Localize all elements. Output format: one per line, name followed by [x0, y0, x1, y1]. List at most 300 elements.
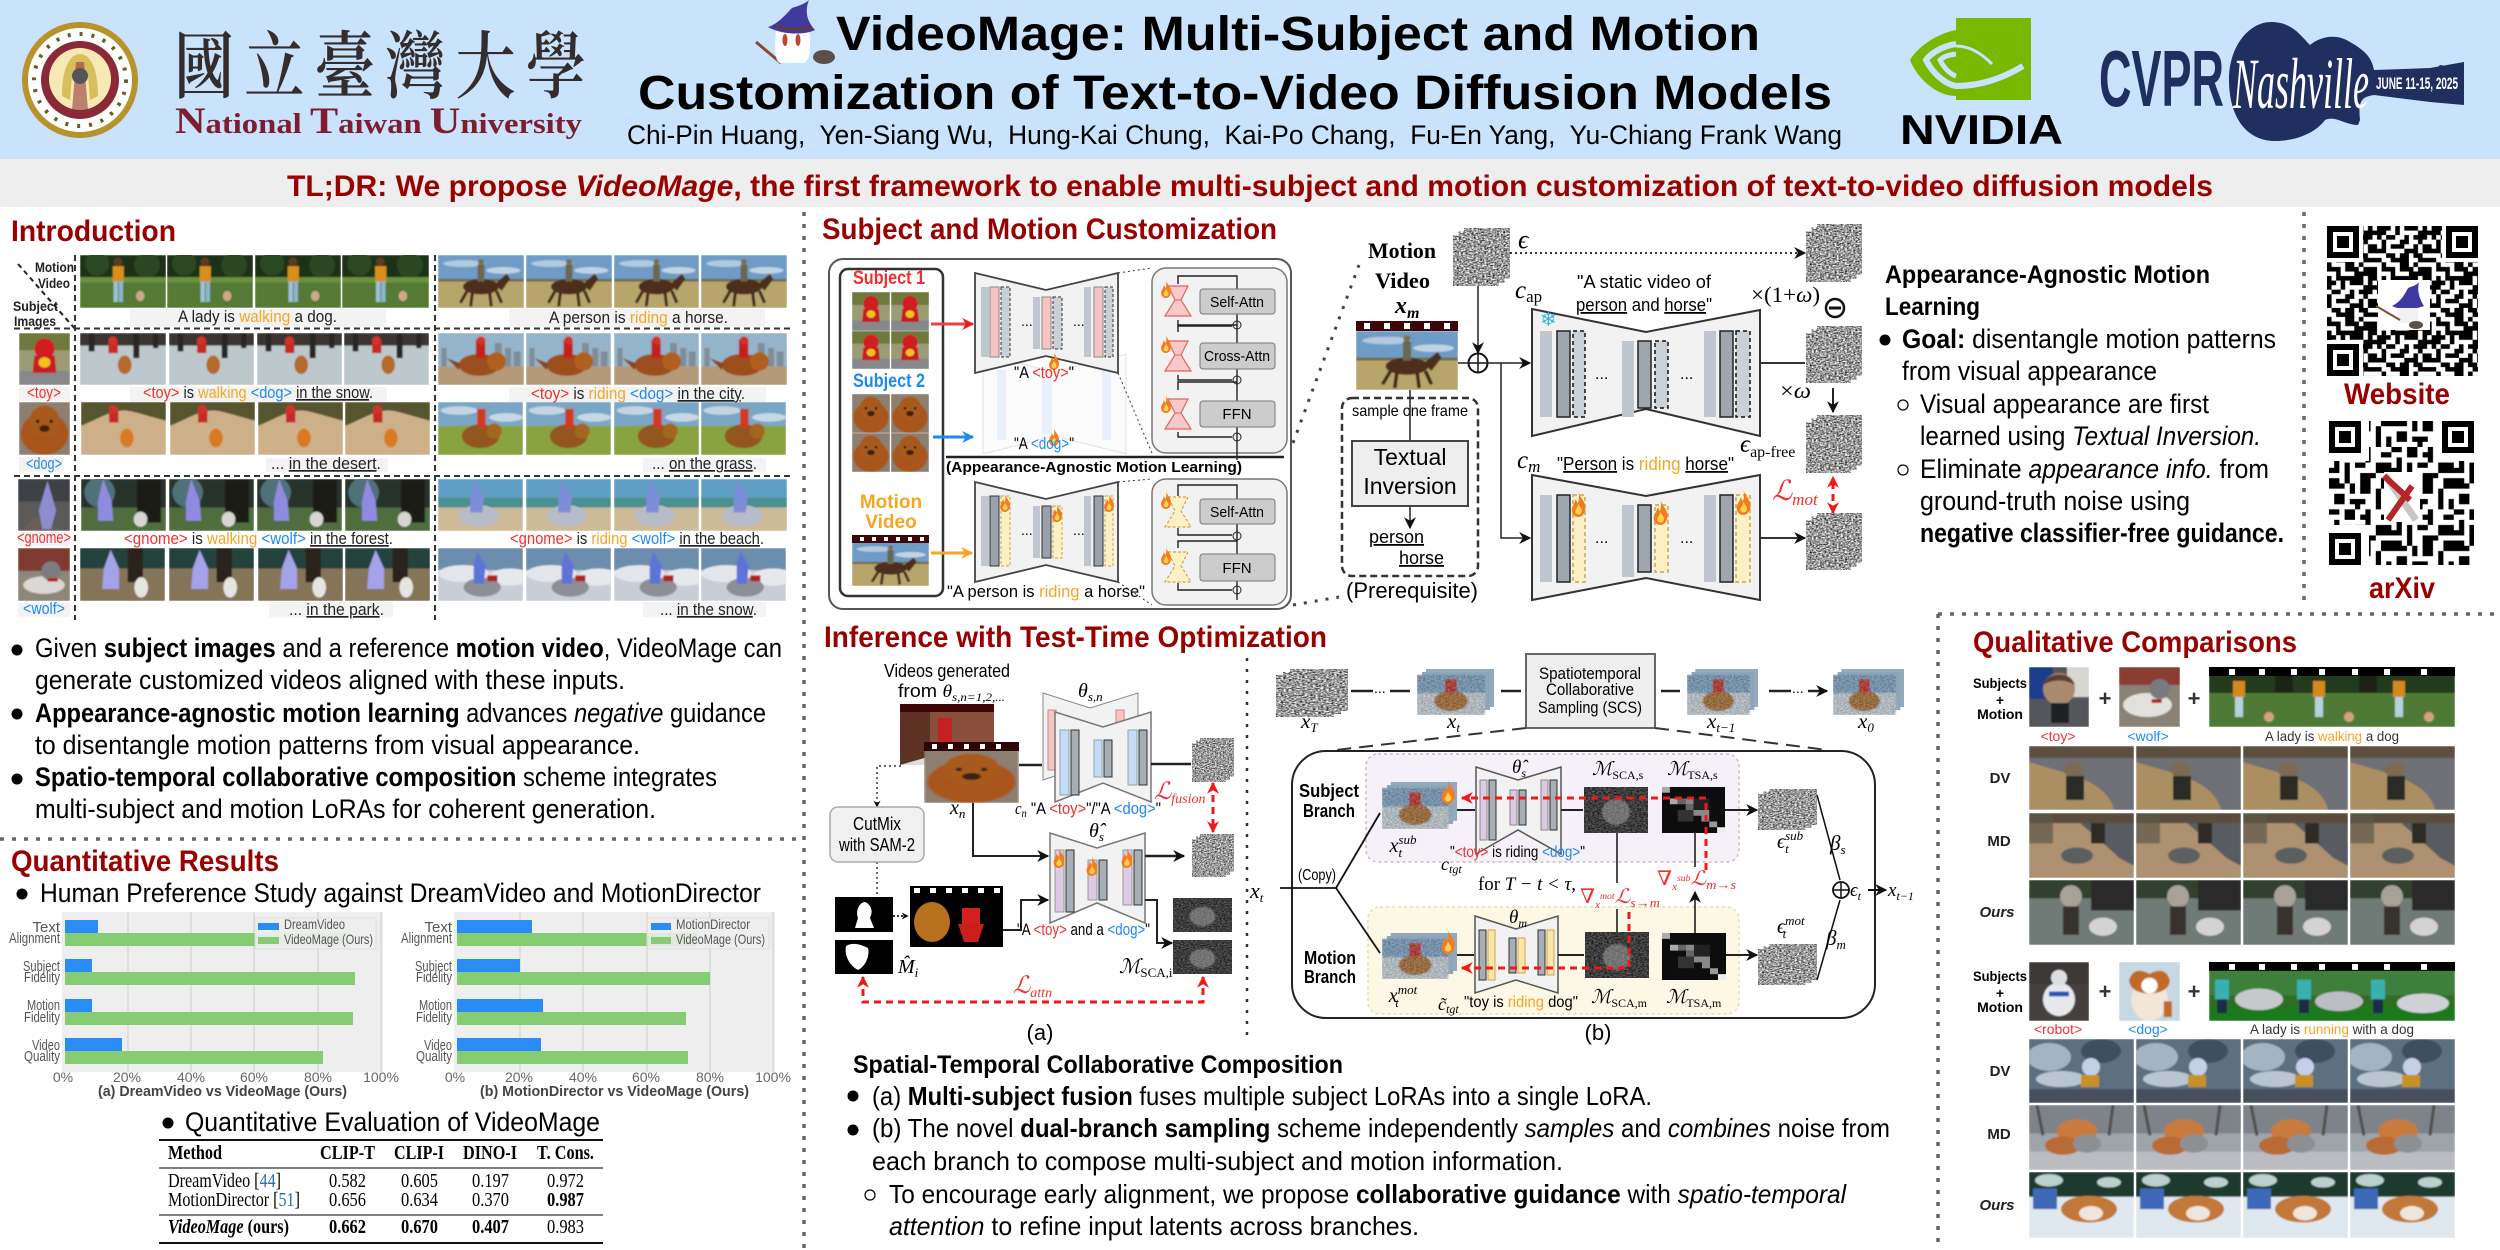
- bar chart: DreamVideo vs VideoMage: Fidelity: [24, 969, 60, 986]
- prompts row: <robot>: [2034, 1021, 2082, 1037]
- branch connectors: t: [1858, 889, 1862, 903]
- motion branch: ϵ: [1777, 916, 1785, 938]
- inputs row: [1973, 962, 2455, 1021]
- prerequisite box: (Prerequisite): [1346, 578, 1478, 603]
- table: quantitative evaluation: 0.972: [547, 1170, 584, 1192]
- inputs row: Motion: [1977, 999, 2023, 1015]
- unet: appearance: [1532, 309, 1760, 436]
- QR code: arXiv: [2329, 421, 2474, 565]
- generated video frames: [900, 704, 1019, 803]
- motion branch: c̃: [1438, 994, 1446, 1014]
- bar chart: DreamVideo vs VideoMage: [9, 912, 399, 1100]
- prompts: "A <toy>": [1014, 363, 1074, 382]
- logo: CVPR Nashville: [2099, 22, 2464, 141]
- collaborative guidance: for T − t < τ,: [1478, 874, 1576, 895]
- branch connectors: [1249, 795, 1914, 980]
- prerequisite box: Inversion: [1363, 473, 1457, 499]
- connectors: [1458, 286, 1530, 538]
- logo: NTU English wordmark: N ational T aiwan U niversity: [175, 100, 582, 142]
- label: Website: Website: [2344, 378, 2450, 411]
- subject branch: "<toy> is riding <dog>": [1450, 844, 1585, 861]
- panel: Subject and Motion Customization: [822, 213, 2284, 609]
- bar chart: DreamVideo vs VideoMage: 40%: [177, 1069, 205, 1085]
- table: quantitative evaluation: MotionDirector [51]: [168, 1189, 300, 1211]
- sublabel: appearance-agnostic motion learning: (Appearance-Agnostic Motion Learning): [946, 459, 1242, 476]
- block panel: motion attention: [1118, 479, 1287, 605]
- bar chart: MotionDirector vs VideoMage: 100%: [755, 1069, 791, 1085]
- unet: motion prompt: [1532, 475, 1760, 600]
- heading: Inference: Inference with Test-Time Optimization: [824, 621, 1327, 654]
- table: quantitative evaluation: VideoMage (ours): [168, 1216, 289, 1238]
- row: DV: DV: [1990, 1063, 2010, 1080]
- table: quantitative evaluation: 0.407: [472, 1216, 509, 1238]
- collaborative guidance: ℒ: [1691, 868, 1707, 890]
- row: DV: DV: [1990, 770, 2010, 787]
- captions: ... on the grass.: [652, 454, 757, 473]
- header banner: [0, 0, 2500, 159]
- collaborative guidance: ∇: [1580, 886, 1594, 908]
- subject branch: Subject: [1299, 781, 1359, 801]
- captions: ... in the snow.: [660, 600, 757, 619]
- icon: mage ghost: [756, 0, 835, 64]
- corner axis labels: Images: [14, 313, 56, 329]
- motion video thumbnail: Video: [865, 512, 917, 533]
- diagram (b): dual-branch sampling: [1249, 654, 1914, 1045]
- sampling chain: ...: [1374, 680, 1386, 696]
- input labels: m: [1407, 305, 1419, 322]
- bar chart: DreamVideo vs VideoMage: (a) DreamVideo vs VideoMage (Ours): [98, 1083, 347, 1100]
- logo: NTU Chinese wordmark: 國立臺灣大學: [174, 9, 586, 114]
- prompts row: <wolf>: [2127, 728, 2169, 744]
- text: spatial-temporal collaborative composition: Spatial-Temporal Collaborative Composition: [853, 1051, 1343, 1079]
- title: [638, 8, 1832, 120]
- condition labels: c: [1517, 447, 1528, 474]
- bar chart: DreamVideo vs VideoMage: VideoMage (Ours): [284, 931, 373, 947]
- labels (a): ℳ: [1119, 956, 1140, 978]
- bar chart: MotionDirector vs VideoMage: 20%: [505, 1069, 533, 1085]
- unet: subject models: s,n: [1088, 689, 1103, 704]
- bar chart: DreamVideo vs VideoMage: Video: [32, 1037, 60, 1054]
- corner axis labels: Video: [38, 275, 70, 291]
- subject thumbnails: [18, 333, 70, 601]
- unet: motion prompt: ...: [1595, 530, 1608, 547]
- inputs row: +: [2099, 686, 2111, 711]
- table: quantitative evaluation: 0.656: [329, 1189, 366, 1211]
- bar chart: MotionDirector vs VideoMage: Fidelity: [416, 1009, 452, 1026]
- bar chart: MotionDirector vs VideoMage: Motion: [419, 997, 452, 1014]
- masks and composite: [835, 886, 1003, 974]
- table: quantitative evaluation: DreamVideo [44]: [168, 1170, 281, 1192]
- intro bullets: multi-subject and motion LoRAs for coherent generation.: [35, 794, 656, 824]
- text: appearance-agnostic motion learning: Appearance-Agnostic Motion: [1885, 261, 2210, 289]
- caption (b): (b): [1585, 1020, 1611, 1045]
- label: videos generated: Videos generated: [884, 661, 1010, 681]
- motion video thumbnail: [852, 492, 929, 586]
- inputs row: +: [2188, 686, 2200, 711]
- image grid: toy and dog: [80, 333, 787, 455]
- branch connectors: β: [1826, 926, 1836, 950]
- table: quantitative evaluation: 0.370: [472, 1189, 509, 1211]
- motion branch: ℳ: [1666, 987, 1686, 1008]
- branch connectors: t−1: [1896, 889, 1914, 903]
- attention loss path: [863, 977, 1203, 1002]
- diagram (a): multi-subject fusion: [830, 661, 1234, 1045]
- labels (a): ℒ: [1154, 779, 1171, 805]
- captions: [17, 307, 766, 619]
- unet: appearance: ...: [1595, 366, 1608, 383]
- labels (a): "A: [1027, 799, 1049, 818]
- comparison block 1: [1973, 667, 2455, 945]
- collaborative guidance: m→s: [1706, 877, 1736, 892]
- text: appearance-agnostic motion learning: Visual appearance are first: [1920, 389, 2209, 419]
- labels (a): fusion: [1171, 792, 1206, 807]
- noise maps (a): [1192, 738, 1234, 877]
- subject branch: SCA,s: [1612, 768, 1644, 782]
- table: quantitative evaluation: 0.197: [472, 1170, 509, 1192]
- inputs row: Motion: [1977, 706, 2023, 722]
- intro bullets: Given subject images and a reference motion video, VideoMage can: [35, 633, 782, 663]
- label: videos generated: from θ: [898, 681, 951, 701]
- collaborative guidance: ∇: [1657, 868, 1671, 890]
- intro bullets: generate customized videos aligned with these inputs.: [35, 665, 625, 695]
- collaborative guidance: ℒ: [1615, 886, 1631, 908]
- row: MD: [1987, 813, 2455, 878]
- block panel: motion attention: FFN: [1222, 560, 1252, 577]
- bar chart: MotionDirector vs VideoMage: Text: [424, 919, 453, 936]
- collaborative guidance: x: [1671, 882, 1678, 893]
- row: DV: [1990, 746, 2455, 810]
- block panel: motion attention: Self-Attn: [1210, 504, 1264, 521]
- inputs row: +: [2099, 979, 2111, 1004]
- unet: fused model: θ̂: [1089, 820, 1099, 842]
- input labels: x: [1395, 293, 1407, 319]
- subject 2 images: Subject 2: [853, 371, 925, 392]
- motion branch: SCA,m: [1611, 996, 1648, 1010]
- intro bullets: [12, 633, 782, 824]
- SCS box: [1526, 654, 1655, 728]
- heading: Subject and Motion Customization: Subject and Motion Customization: [822, 213, 1277, 246]
- bar chart: DreamVideo vs VideoMage: 20%: [113, 1069, 141, 1085]
- table: quantitative evaluation: 0.987: [547, 1189, 584, 1211]
- captions: A person is riding a horse.: [549, 308, 728, 327]
- bar chart: DreamVideo vs VideoMage: 60%: [240, 1069, 268, 1085]
- sampling chain: [1276, 669, 1904, 735]
- text: appearance-agnostic motion learning: [1880, 261, 2284, 548]
- text: appearance-agnostic motion learning: negative classifier-free guidance.: [1920, 518, 2284, 548]
- panel: Introduction: [11, 215, 794, 824]
- captions: <toy> is riding <dog> in the city.: [531, 384, 745, 403]
- text: appearance-agnostic motion learning: Goal: disentangle motion patterns: [1902, 324, 2276, 354]
- title: VideoMage: Multi-Subject and Motion: [836, 8, 1760, 61]
- CutMix box: CutMix: [853, 814, 901, 834]
- subject 1 images: Subject 1: [853, 268, 925, 289]
- subject branch: ℳ: [1667, 759, 1687, 780]
- bar chart: MotionDirector vs VideoMage: 80%: [696, 1069, 724, 1085]
- table: quantitative evaluation: 0.662: [329, 1216, 366, 1238]
- prompts row: <toy>: [2040, 728, 2076, 744]
- labels (a): [897, 779, 1213, 1001]
- comparison block 2: [1973, 962, 2455, 1238]
- captions: A lady is walking a dog.: [178, 307, 337, 326]
- bar chart: MotionDirector vs VideoMage: 0%: [445, 1069, 465, 1085]
- corner axis labels: Motion: [35, 259, 74, 275]
- bar chart: DreamVideo vs VideoMage: Motion: [27, 997, 60, 1014]
- prerequisite box: Textual: [1374, 444, 1446, 470]
- labels (a): x: [950, 797, 959, 819]
- text: appearance-agnostic motion learning: ground-truth noise using: [1920, 486, 2190, 516]
- condition labels: c: [1515, 277, 1526, 304]
- captions: <dog>: [26, 454, 62, 473]
- table: quantitative evaluation: CLIP-T: [320, 1142, 376, 1164]
- table: quantitative evaluation: 0.582: [329, 1170, 366, 1192]
- guidance arrows and labels: [1740, 282, 1844, 538]
- labels (a): SCA,i: [1140, 965, 1173, 980]
- subject branch: ℳ: [1592, 759, 1612, 780]
- unet: motion: ...: [1021, 522, 1033, 538]
- table: quantitative evaluation: 0.634: [401, 1189, 438, 1211]
- branch connectors: x: [1250, 878, 1260, 903]
- logo: NVIDIA: NVIDIA: [1900, 106, 2063, 153]
- bar chart: DreamVideo vs VideoMage: 80%: [304, 1069, 332, 1085]
- unet: subject models: [1043, 680, 1151, 802]
- captions: ... in the desert.: [271, 454, 381, 473]
- table: quantitative evaluation: T. Cons.: [537, 1142, 594, 1164]
- block panel: subject attention: Self-Attn: [1210, 294, 1264, 311]
- collaborative guidance: mot: [1600, 891, 1615, 901]
- inputs row: +: [1996, 692, 2004, 708]
- panel: QR codes: [2327, 226, 2478, 605]
- bar chart: MotionDirector vs VideoMage: 40%: [569, 1069, 597, 1085]
- condition labels: m: [1528, 457, 1540, 476]
- inputs row: +: [1996, 985, 2004, 1001]
- unet: appearance: ❄: [1540, 309, 1557, 331]
- sampling chain: x: [1858, 709, 1867, 733]
- motion frame: [1356, 321, 1458, 390]
- SCS box: Spatiotemporal: [1539, 664, 1641, 683]
- guidance arrows and labels: ℒ: [1772, 476, 1792, 507]
- title: Customization of Text-to-Video Diffusion Models: [638, 67, 1832, 120]
- prerequisite box: person: [1369, 527, 1424, 547]
- noise input: ϵ: [1518, 225, 1530, 254]
- table: quantitative evaluation: Method: [168, 1142, 222, 1164]
- inputs row: [1973, 667, 2455, 727]
- labels (a): <toy>"/"A <dog>": [1049, 799, 1162, 818]
- bar chart: DreamVideo vs VideoMage: Quality: [24, 1048, 60, 1065]
- subject branch: TSA,s: [1687, 768, 1718, 782]
- panel: Qualitative Comparisons: [1973, 626, 2455, 1238]
- block panel: subject attention: [1118, 268, 1287, 460]
- text: appearance-agnostic motion learning: Learning: [1885, 293, 1980, 321]
- bar chart: MotionDirector vs VideoMage: MotionDirector: [676, 916, 750, 932]
- bar chart: DreamVideo vs VideoMage: Subject: [23, 958, 61, 975]
- labels (a): "A <toy> and a <dog>": [1017, 920, 1150, 939]
- captions: ... in the park.: [289, 600, 384, 619]
- QR code: website: [2327, 226, 2478, 376]
- subject branch: s: [1521, 766, 1526, 780]
- sampling chain: T: [1310, 720, 1318, 735]
- image grid: gnome and wolf: [80, 477, 794, 601]
- bar chart: MotionDirector vs VideoMage: Subject: [415, 958, 453, 975]
- text: spatial-temporal collaborative composition: each branch to compose multi-subject and motion information.: [872, 1146, 1563, 1176]
- subject branch: c: [1441, 854, 1449, 874]
- bar chart: MotionDirector vs VideoMage: Video: [424, 1037, 452, 1054]
- motion video thumbnail: Motion: [860, 492, 922, 513]
- labels (a): n: [959, 806, 965, 821]
- labels (a): c: [1015, 799, 1027, 820]
- captions: <gnome>: [17, 528, 71, 547]
- bar chart: MotionDirector vs VideoMage: (b) MotionDirector vs VideoMage (Ours): [480, 1083, 749, 1100]
- output noise maps: [1806, 224, 1862, 570]
- branch connectors: x: [1888, 880, 1896, 901]
- text: appearance-agnostic motion learning: Eliminate appearance info. from: [1920, 454, 2269, 484]
- branch connectors: ϵ: [1850, 880, 1858, 901]
- inputs row: Subjects: [1973, 968, 2027, 984]
- row: MD: MD: [1987, 833, 2011, 850]
- row: MD: MD: [1987, 1126, 2011, 1143]
- branch connectors: (Copy): [1298, 867, 1336, 884]
- row: Ours: [1979, 1172, 2455, 1238]
- text: spatial-temporal collaborative composition: (b) The novel dual-branch sampling scheme independently samples and combines noise from: [872, 1113, 1890, 1143]
- subject branch: Branch: [1303, 801, 1355, 821]
- condition labels: person and horse": [1576, 295, 1712, 315]
- bar chart: MotionDirector vs VideoMage: Fidelity: [416, 969, 452, 986]
- subject branch: sub: [1398, 832, 1417, 847]
- prompts row: [2034, 1021, 2414, 1037]
- bar chart: MotionDirector vs VideoMage: VideoMage (Ours): [676, 931, 765, 947]
- subject branch: t: [1785, 841, 1789, 856]
- bar chart: DreamVideo vs VideoMage: 100%: [363, 1069, 399, 1085]
- bar chart: MotionDirector vs VideoMage: Quality: [416, 1048, 452, 1065]
- CutMix box: with SAM-2: [838, 835, 915, 855]
- sampling chain: 0: [1867, 720, 1874, 735]
- bar chart: DreamVideo vs VideoMage: Fidelity: [24, 1009, 60, 1026]
- diagram: customization overview: [829, 259, 1291, 609]
- panel: Inference with Test-Time Optimization: [824, 621, 1914, 1241]
- collaborative guidance: x: [1594, 900, 1601, 911]
- bar chart: DreamVideo vs VideoMage: Alignment: [9, 930, 61, 947]
- collaborative guidance: s→m: [1630, 895, 1660, 910]
- condition labels: ap: [1526, 287, 1542, 306]
- caption (a): (a): [1027, 1020, 1053, 1045]
- motion branch: Motion: [1304, 948, 1356, 968]
- input labels: Video: [1375, 268, 1430, 293]
- logo: CVPR Nashville: Nashville: [2232, 44, 2369, 124]
- text: spatial-temporal collaborative composition: To encourage early alignment, we propose collaborative guidance with spatio-temporal: [889, 1179, 1847, 1209]
- text: spatial-temporal collaborative composition: (a) Multi-subject fusion fuses multiple subject LoRAs into a single LoRA.: [872, 1081, 1652, 1111]
- input labels: Motion: [1368, 238, 1436, 263]
- labels (a): i: [915, 965, 919, 980]
- guidance arrows and labels: ap-free: [1750, 444, 1795, 461]
- table: quantitative evaluation: DINO-I: [463, 1142, 517, 1164]
- motion branch: mot: [1398, 982, 1418, 997]
- labels (a): ℒ: [1013, 973, 1030, 999]
- unet: subject models: θ: [1078, 680, 1088, 702]
- CutMix box: [830, 807, 924, 862]
- row: Ours: Ours: [1979, 904, 2015, 921]
- input labels: [1368, 238, 1436, 322]
- sampling chain: t: [1456, 720, 1460, 735]
- guidance arrows and labels: mot: [1792, 490, 1819, 509]
- attention maps (a): [1173, 898, 1232, 974]
- motion branch: t: [1783, 926, 1787, 941]
- unet: subject: ...: [1073, 313, 1085, 329]
- table: quantitative evaluation: [159, 1140, 603, 1243]
- subject branch: θ̂: [1512, 757, 1521, 778]
- label: videos generated: [884, 661, 1010, 704]
- subject branch: x: [1390, 835, 1398, 857]
- unet: fused model: s: [1099, 829, 1104, 844]
- guidance arrows and labels: ×(1+ω): [1751, 282, 1820, 307]
- motion branch: ℳ: [1591, 987, 1611, 1008]
- captions: <toy>: [27, 383, 61, 402]
- motion branch: m: [1518, 916, 1527, 930]
- heading: Qualitative Comparisons: Qualitative Comparisons: [1973, 626, 2297, 659]
- subject 1 images: [852, 268, 929, 369]
- table: quantitative evaluation: 0.670: [401, 1216, 438, 1238]
- logo: CVPR Nashville: CVPR: [2099, 34, 2224, 123]
- unet: motion prompt: ...: [1680, 530, 1693, 547]
- TL;DR banner: [0, 159, 2500, 207]
- prerequisite box: sample one frame: [1352, 403, 1468, 420]
- block panel: subject attention: Cross-Attn: [1204, 348, 1270, 365]
- subject branch: [1299, 754, 1817, 876]
- subject branch: ϵ: [1777, 831, 1785, 853]
- TL;DR banner: TL;DR: We propose VideoMage, the first framework to enable multi-subject and motion customization of text-to-video diffusion models: [287, 170, 2213, 203]
- bar chart: DreamVideo vs VideoMage: DreamVideo: [284, 916, 345, 932]
- captions: <gnome> is riding <wolf> in the beach.: [510, 529, 764, 548]
- guidance arrows and labels: ϵ: [1740, 431, 1750, 458]
- labels (a): n: [1022, 806, 1027, 820]
- unet: fused model: [1050, 820, 1145, 923]
- heading: Introduction: Introduction: [11, 215, 176, 248]
- motion branch: θ: [1509, 907, 1518, 928]
- bar chart: DreamVideo vs VideoMage: Text: [32, 919, 61, 936]
- subject branch: tgt: [1449, 862, 1462, 876]
- intro bullets: to disentangle motion patterns from visual appearance.: [35, 730, 640, 760]
- image grid: motion video walking: [80, 252, 787, 308]
- row: MD: [1987, 1105, 2455, 1170]
- text: appearance-agnostic motion learning: from visual appearance: [1902, 356, 2157, 386]
- sampling chain: x: [1447, 709, 1456, 733]
- collaborative guidance: sub: [1677, 873, 1691, 883]
- labels (a): M̂: [898, 956, 915, 978]
- labels (a): attn: [1030, 986, 1052, 1001]
- motion branch: tgt: [1446, 1002, 1459, 1016]
- corner axis labels: [13, 259, 76, 330]
- noise input: [1453, 225, 1530, 286]
- row: DV: [1990, 1039, 2455, 1103]
- branch connectors: t: [1260, 890, 1264, 905]
- bar chart: MotionDirector vs VideoMage: 60%: [632, 1069, 660, 1085]
- prerequisite box: horse: [1399, 548, 1444, 568]
- bar chart: DreamVideo vs VideoMage: 0%: [53, 1069, 73, 1085]
- prompts row: A lady is walking a dog: [2265, 728, 2399, 744]
- captions: <wolf>: [23, 599, 65, 618]
- label: videos generated: s,n=1,2,...: [952, 690, 1005, 704]
- prompts row: [2040, 728, 2399, 744]
- intro bullets: Appearance-agnostic motion learning advances negative guidance: [35, 698, 766, 728]
- condition labels: "A static video of: [1577, 272, 1712, 292]
- table: quantitative evaluation: CLIP-I: [394, 1142, 444, 1164]
- bar chart: MotionDirector vs VideoMage: Alignment: [401, 930, 453, 947]
- motion branch: TSA,m: [1686, 996, 1722, 1010]
- SCS box: Collaborative: [1546, 680, 1634, 699]
- arrows (a): [877, 764, 1191, 943]
- subheading: preference study: Human Preference Study against DreamVideo and MotionDirector: [40, 878, 761, 908]
- motion branch: x: [1389, 985, 1398, 1007]
- branch connectors: m: [1836, 937, 1846, 952]
- heading: Quantitative Results: Quantitative Results: [11, 845, 279, 878]
